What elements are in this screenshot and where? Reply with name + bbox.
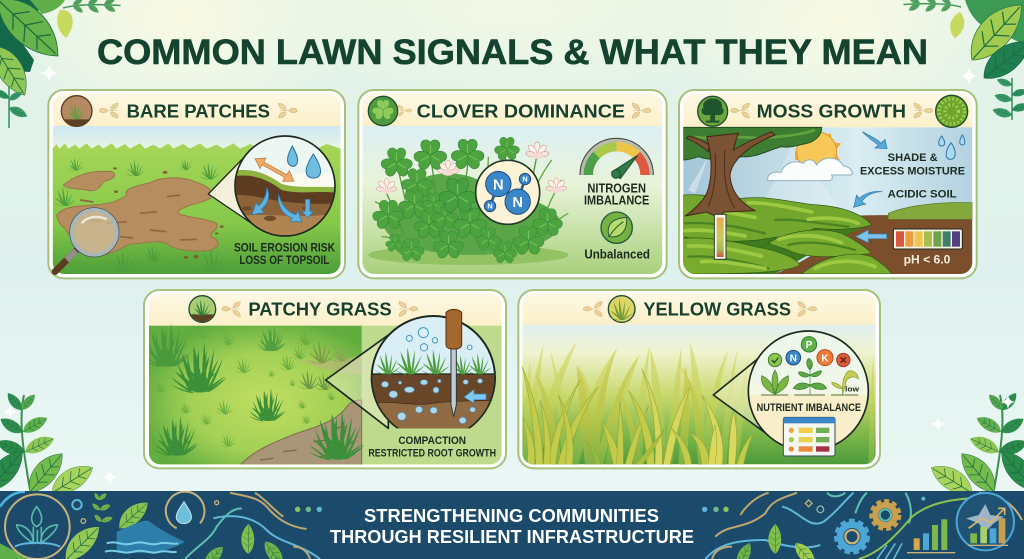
small tufts xyxy=(153,329,352,447)
icon: bare patches xyxy=(61,96,92,126)
arrow: to soil xyxy=(856,230,887,243)
caption: LOSS OF TOPSOIL xyxy=(239,253,329,267)
ornaments xyxy=(731,103,933,118)
distant moss xyxy=(888,202,972,219)
sparkles xyxy=(3,64,1015,484)
label: acidic soil: ACIDIC SOIL xyxy=(888,188,957,200)
label: shade and moisture xyxy=(860,152,965,177)
heading: CLOVER DOMINANCE xyxy=(417,100,625,121)
title: COMMON LAWN SIGNALS & WHAT THEY MEAN xyxy=(97,33,928,72)
label: nutrient imbalance: NUTRIENT IMBALANCE xyxy=(757,402,861,414)
banner text: STRENGTHENING COMMUNITIES xyxy=(364,505,659,526)
grass tufts xyxy=(53,157,227,274)
foliage: bottom right xyxy=(926,390,1024,501)
clover patch xyxy=(371,137,568,264)
label: low: low xyxy=(845,385,859,394)
front grass blades xyxy=(522,365,753,465)
panel: yellow grass xyxy=(518,290,880,468)
icon: moss xyxy=(936,95,968,127)
panel: clover dominance xyxy=(358,90,667,278)
icon: yellow grass xyxy=(608,296,635,322)
moss mounds xyxy=(683,195,872,274)
label: unbalanced: Unbalanced xyxy=(584,247,650,262)
gear icons xyxy=(837,521,867,552)
banner art: left xyxy=(0,492,322,559)
icon: tree xyxy=(698,96,728,126)
arrow: surface runoff xyxy=(255,158,294,181)
ornaments xyxy=(398,103,651,118)
caption xyxy=(368,435,496,460)
bare soil patch xyxy=(57,178,218,255)
banner text: THROUGH RESILIENT INFRASTRUCTURE xyxy=(330,526,694,547)
plants xyxy=(761,358,858,395)
heading: PATCHY GRASS xyxy=(248,299,392,320)
light beams xyxy=(766,147,840,208)
panel: patchy grass xyxy=(141,290,506,468)
callout: compaction xyxy=(326,309,497,439)
bar chart xyxy=(907,519,955,553)
nitrogen molecule badge: N xyxy=(512,195,523,211)
label: shade and moisture: SHADE & xyxy=(888,152,938,164)
callout: nutrients xyxy=(713,331,868,456)
panel: bare patches xyxy=(48,90,345,278)
NPK nutrient badges xyxy=(768,337,850,367)
NPK nutrient badges: K xyxy=(821,353,829,364)
label: nitrogen imbalance: IMBALANCE xyxy=(584,193,649,207)
heading: MOSS GROWTH xyxy=(757,100,906,121)
icon: rain drops xyxy=(939,135,965,159)
label: pH: pH < 6.0 xyxy=(904,254,950,267)
vertical test strip xyxy=(714,214,726,259)
nitrogen molecule badge: N xyxy=(493,177,504,193)
arrows: soil loss xyxy=(252,187,313,222)
caption: RESTRICTED ROOT GROWTH xyxy=(368,448,496,460)
pH strip xyxy=(893,229,962,249)
soil test chart xyxy=(783,417,835,456)
icon: clover xyxy=(368,96,398,126)
panel: moss growth xyxy=(679,90,977,278)
foliage: top right xyxy=(904,0,1024,120)
tree xyxy=(683,127,822,217)
foliage: bottom left xyxy=(0,390,98,501)
arrow: shade xyxy=(862,132,887,149)
icon: cloud xyxy=(768,158,852,181)
caption: SOIL EROSION RISK xyxy=(234,241,335,255)
ornaments xyxy=(99,103,297,118)
mid grass blades xyxy=(535,348,706,465)
label: nitrogen imbalance xyxy=(584,182,649,207)
icon: water drops xyxy=(288,146,321,178)
NPK nutrient badges: P xyxy=(806,340,813,351)
soil probe xyxy=(446,309,462,417)
heading: YELLOW GRASS xyxy=(643,299,791,320)
caption: COMPACTION xyxy=(398,435,466,447)
foliage: top left xyxy=(0,0,121,128)
NPK nutrient badges: N xyxy=(790,353,797,364)
banner art: right xyxy=(702,493,1022,559)
caption xyxy=(234,241,335,267)
label: shade and moisture: EXCESS MOISTURE xyxy=(860,165,965,177)
nitrogen molecule badge: N xyxy=(522,175,528,184)
bubbles xyxy=(406,328,472,351)
icon: sun xyxy=(795,132,841,164)
nitrogen molecule badge: N xyxy=(487,202,493,211)
callout: erosion xyxy=(208,133,337,237)
icon: grass xyxy=(189,296,216,322)
banner text xyxy=(330,505,694,547)
ornaments xyxy=(583,302,817,316)
ornaments xyxy=(222,302,418,316)
label: nitrogen imbalance: NITROGEN xyxy=(587,182,646,196)
heading: BARE PATCHES xyxy=(127,100,270,121)
nitrogen gauge xyxy=(580,138,653,179)
soil xyxy=(775,215,972,274)
footer banner xyxy=(0,491,1024,559)
back grass blades xyxy=(522,340,874,465)
large tufts xyxy=(141,321,367,463)
arrow: pressure xyxy=(464,390,486,403)
icon: leaf badge xyxy=(601,212,632,243)
magnifying glass xyxy=(55,208,119,272)
nitrogen molecule badge xyxy=(476,160,540,224)
arrow: acidic soil xyxy=(854,191,882,207)
